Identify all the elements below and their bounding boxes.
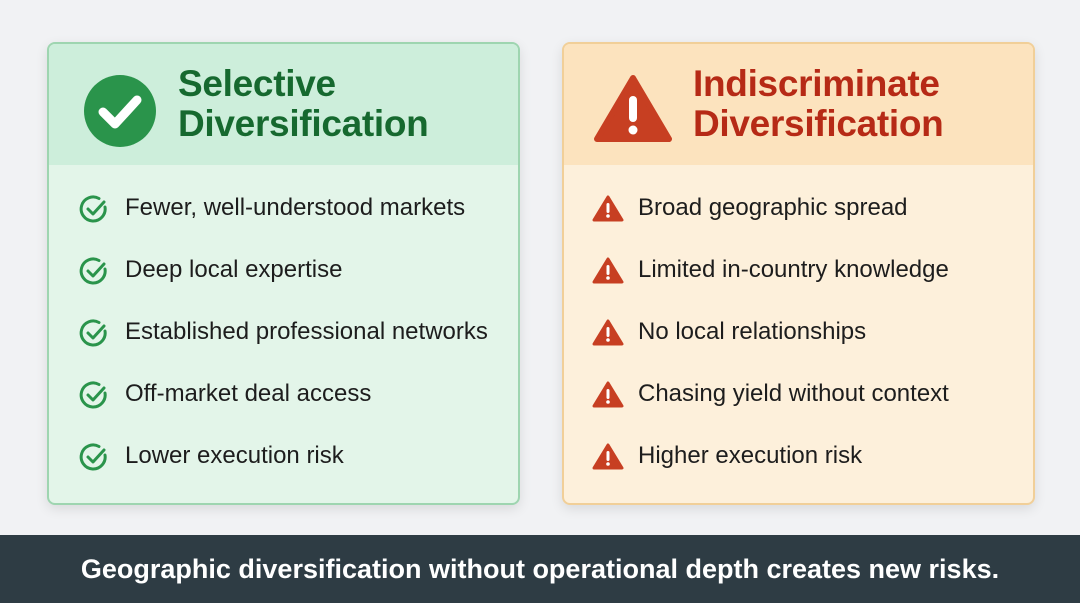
item 4 xyxy=(80,380,371,408)
icon: green check circle xyxy=(84,75,156,147)
title: Selective xyxy=(178,63,336,104)
footer banner xyxy=(0,535,1080,603)
panel: selective diversification xyxy=(47,42,520,505)
item 3 xyxy=(592,318,866,346)
panel: selective diversification: Fewer, well-understood markets xyxy=(125,194,465,221)
icon: warning triangle xyxy=(594,75,672,142)
title: Indiscriminate xyxy=(693,63,940,104)
title: Diversification xyxy=(693,103,943,144)
panel: indiscriminate diversification: Higher execution risk xyxy=(638,442,862,469)
item 1 xyxy=(592,194,908,222)
panel: selective diversification: Established professional networks xyxy=(125,318,488,345)
title xyxy=(693,63,943,144)
panel: selective diversification: Off-market deal access xyxy=(125,380,371,407)
title: Diversification xyxy=(178,103,428,144)
panel: indiscriminate diversification: No local relationships xyxy=(638,318,866,345)
item 5 xyxy=(592,442,862,470)
item 2 xyxy=(592,256,949,284)
item 5 xyxy=(80,442,344,470)
panel: selective diversification: Deep local expertise xyxy=(125,256,342,283)
item 2 xyxy=(80,256,342,284)
panel: indiscriminate diversification: Limited in-country knowledge xyxy=(638,256,949,283)
panel: indiscriminate diversification: Chasing yield without context xyxy=(638,380,949,407)
header band xyxy=(564,44,1033,165)
title xyxy=(178,63,428,144)
item 1 xyxy=(80,194,465,222)
item 3 xyxy=(80,318,488,346)
header band xyxy=(49,44,518,165)
panel: indiscriminate diversification xyxy=(562,42,1035,505)
item 4 xyxy=(592,380,949,408)
footer banner: Geographic diversification without operational depth creates new risks. xyxy=(81,554,999,584)
panel: selective diversification: Lower execution risk xyxy=(125,442,344,469)
panel: indiscriminate diversification: Broad geographic spread xyxy=(638,194,908,221)
